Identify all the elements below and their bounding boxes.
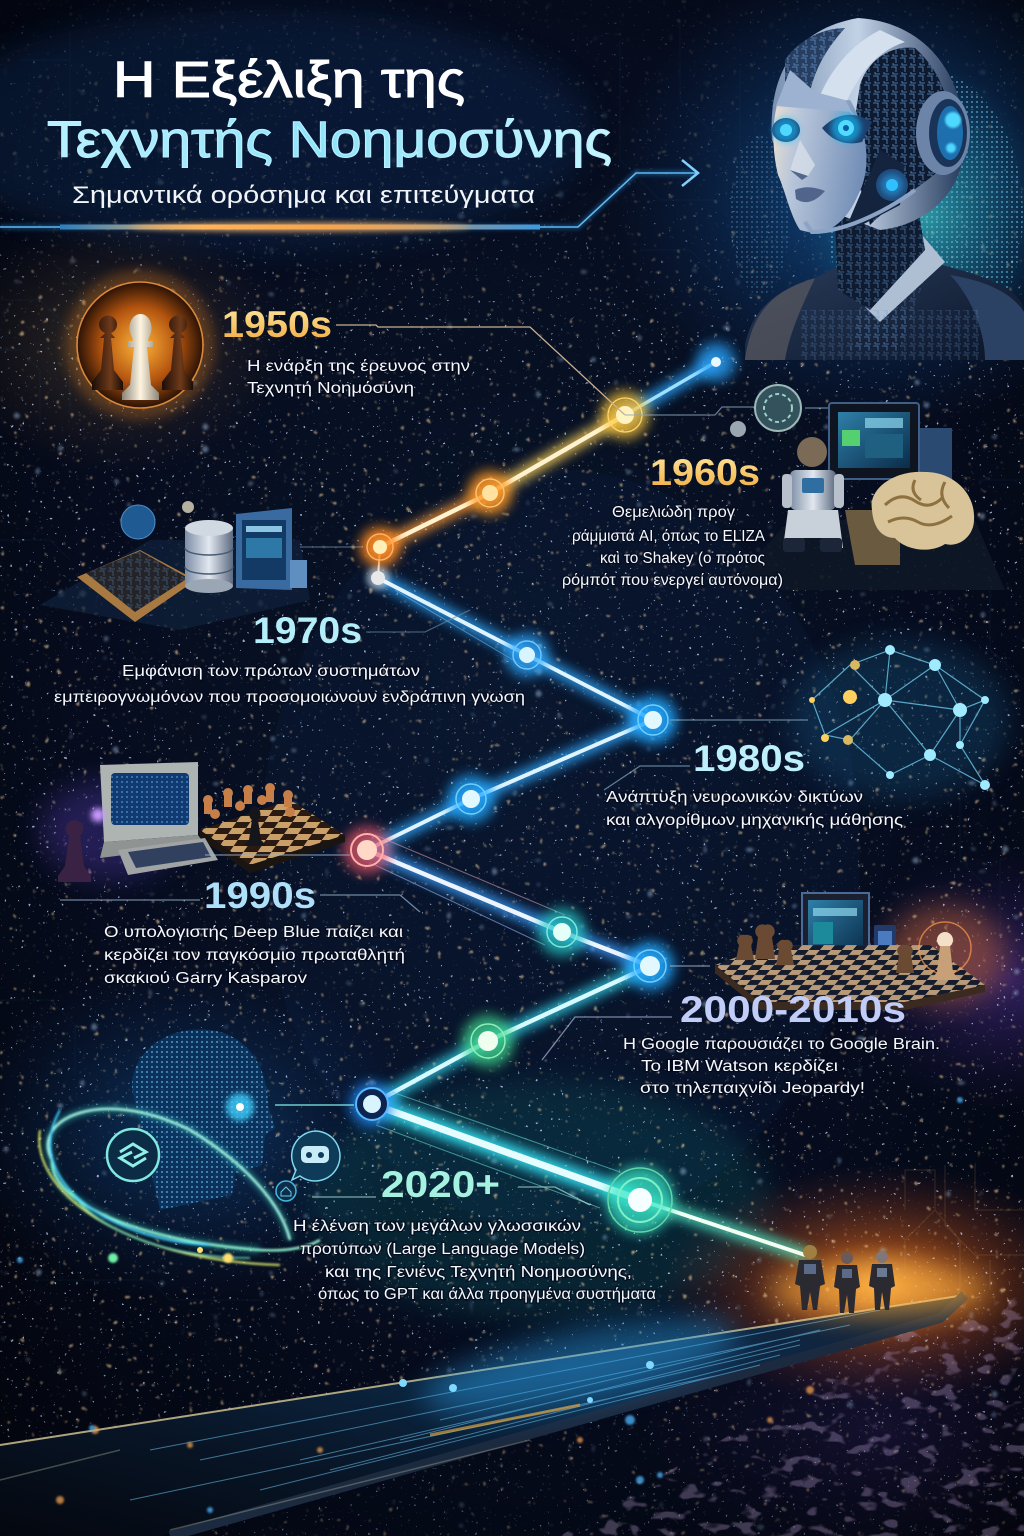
description 2020+: Η έλένση των μεγάλων γλωσσικών [293,1218,581,1235]
connector 1980s [604,720,808,790]
description 1970s [54,663,525,706]
description 2000-2010s: Το IBM Watson κερδίζει [641,1058,838,1075]
icon: knot badge [107,1129,159,1181]
description 2020+: και της Γενιένς Τεχνητή Νοημοσύνης, [325,1264,632,1281]
description 1990s: σκακιού Garry Kasparov [104,970,307,987]
description 1980s: Ανάπτυξη νευρωνικών δικτύων [606,789,863,806]
connector 1950s [336,325,625,415]
description 1960s: Θεμελιώδη προγ [612,504,735,521]
node between 1990s and 2000s [538,908,586,956]
node 2020 left [350,1082,394,1126]
keyboard [118,838,218,875]
description 1970s: εμπειρογνωμόνων που προσομοιωνουν ενδράπινη γνωση [54,689,525,706]
left eye [772,117,800,143]
floor platform [725,520,1005,590]
face [773,100,866,232]
orbit glow [48,1109,290,1250]
chess board [200,800,345,865]
amber streak [430,1405,580,1435]
node 1970s [505,633,549,677]
neck [835,190,925,310]
icon: digital head with orbits [39,1029,320,1265]
dark circuit panel [850,48,950,225]
black pawn [243,806,267,846]
icon: lab scene [625,385,1005,590]
node 1960s [360,527,400,567]
three figures [770,1245,990,1316]
left pawn [92,316,123,390]
figure left [795,1245,825,1310]
foreground bokeh lights [17,1097,963,1513]
connector 1990s [60,855,420,912]
year 1950s: 1950s [222,304,332,345]
chip [77,550,196,622]
purple pawn [58,820,91,882]
road circuit lines [130,1310,880,1500]
monitor [802,893,896,967]
connector lines [625,407,832,415]
timeline glowing path [367,362,805,1255]
description 1980s [606,789,903,829]
description 2000-2010s [623,1036,940,1097]
brain [872,472,974,550]
skull [772,18,964,230]
node 1990s [343,826,391,874]
robot portrait [730,18,1024,360]
road lights [399,1361,654,1403]
description 1980s: και αλγορίθμων μηχανικής μάθησης [606,812,903,829]
right eye [822,113,872,143]
description 1950s [247,358,470,397]
glow under path [367,362,805,1255]
robot figure [782,437,844,552]
cheek light [876,169,908,201]
description 2000-2010s: Η Google παρουσιάζει το Google Brain. [623,1036,940,1053]
database [185,520,233,593]
gauge [755,385,801,431]
figure middle [834,1252,860,1313]
title rule with arrow [0,160,698,232]
glowing pawn [919,922,971,980]
year 1960s: 1960s [650,452,760,493]
year 2000-2010s: 2000-2010s [680,989,906,1030]
node 1980s [629,696,677,744]
silver head band [815,30,905,110]
title line one: Η Εξέλιξη της [113,51,465,108]
description 2000-2010s: στο τηλεπαιχνίδι Jeopardy! [640,1080,865,1097]
title line two: Τεχνητής Νοημοσύνης [47,111,612,168]
year 1980s: 1980s [693,738,805,779]
subtitle: Σημαντικά ορόσημα και επιτεύγματα [72,182,535,209]
connector 1970s [366,610,470,632]
panel: 1960s [562,385,1005,590]
icon: neural network [790,640,1010,800]
description 1950s: Τεχνητή Νοημόσύνη [247,380,414,397]
headset [916,91,970,175]
panel: 1950s [65,270,625,420]
panel: 1990s [40,762,420,987]
node 1950s [601,391,649,439]
title [47,51,612,209]
teal data halo [730,70,1023,360]
description 1970s: Εμφάνιση των πρώτων συστημάτων [122,663,420,680]
parallel thin rails [375,590,620,1208]
city ground texture [562,1290,1024,1536]
computer monitor [100,762,205,858]
node start [696,342,736,382]
description 1990s [104,924,405,987]
orbit rings [39,1109,320,1265]
timeline nodes [343,342,736,1234]
year 2020+: 2020+ [381,1164,500,1205]
green glow dots [108,1253,118,1263]
forehead panel [785,28,845,95]
description 2020+: προτύπων (Large Language Models) [300,1241,585,1258]
connector 2020 [312,1187,590,1205]
connector to node [300,546,362,548]
server panel [236,508,307,590]
right pawn [162,316,193,390]
bricks [845,510,900,565]
microphone arm [805,190,915,232]
panel: 1980s [604,640,1010,829]
node between 1950s and 1960s [468,471,512,515]
white king [122,314,159,400]
figure right [869,1251,895,1310]
panel: 2000-2010s [542,893,1005,1097]
node 2000s [626,942,674,990]
description 1950s: Η ενάρξη της έρευνος στην [247,358,470,375]
icon: home badge [276,1181,296,1201]
icon: chat badge [292,1131,340,1181]
node 2020 right [606,1166,674,1234]
description 1960s: ρόμπότ που ενεργεί αυτόνομα) [562,572,783,589]
ground circuit [40,540,310,630]
lips [795,187,825,202]
icon: computer and chess [40,762,345,882]
monitor [829,403,919,479]
panel: 2020+ [39,1029,656,1303]
description 2020+ [293,1218,656,1303]
node green [462,1015,514,1067]
jaw mechanics [846,150,905,228]
description 2020+: όπως το GPT και άλλα προηγμένα συστήματα [318,1286,656,1303]
rear rack [918,428,952,502]
node white small [366,566,390,590]
description 1990s: κερδίζει τον παγκόσμιο πρωταθλητή [104,947,405,964]
year 1970s: 1970s [253,610,362,651]
small orb [121,501,194,539]
node between 1980s and 1990s [447,775,495,823]
panel: 1970s [40,501,525,706]
description 1960s: καὶ το Shakey (ο πρότος [600,550,765,567]
connector 2000s [542,966,710,1060]
icon: board with monitor [715,893,1005,1010]
pieces [736,924,914,973]
nose shadow [790,140,815,176]
icon: chess pieces in orange orb [65,270,215,420]
board [715,945,985,1002]
shoulders and armor [745,235,1024,360]
description 1960s [562,504,783,589]
connector head to node [275,1104,354,1106]
illuminated road [0,1295,965,1536]
description 1990s: Ο υπολογιστής Deep Blue παίζει και [104,924,403,941]
bright core of path [367,362,805,1255]
small sphere [730,421,746,437]
year 1990s: 1990s [204,875,316,916]
description 1960s: ράμμιστά AI, όπως το ELIZA [572,528,766,545]
icon: chip and servers [40,501,362,630]
